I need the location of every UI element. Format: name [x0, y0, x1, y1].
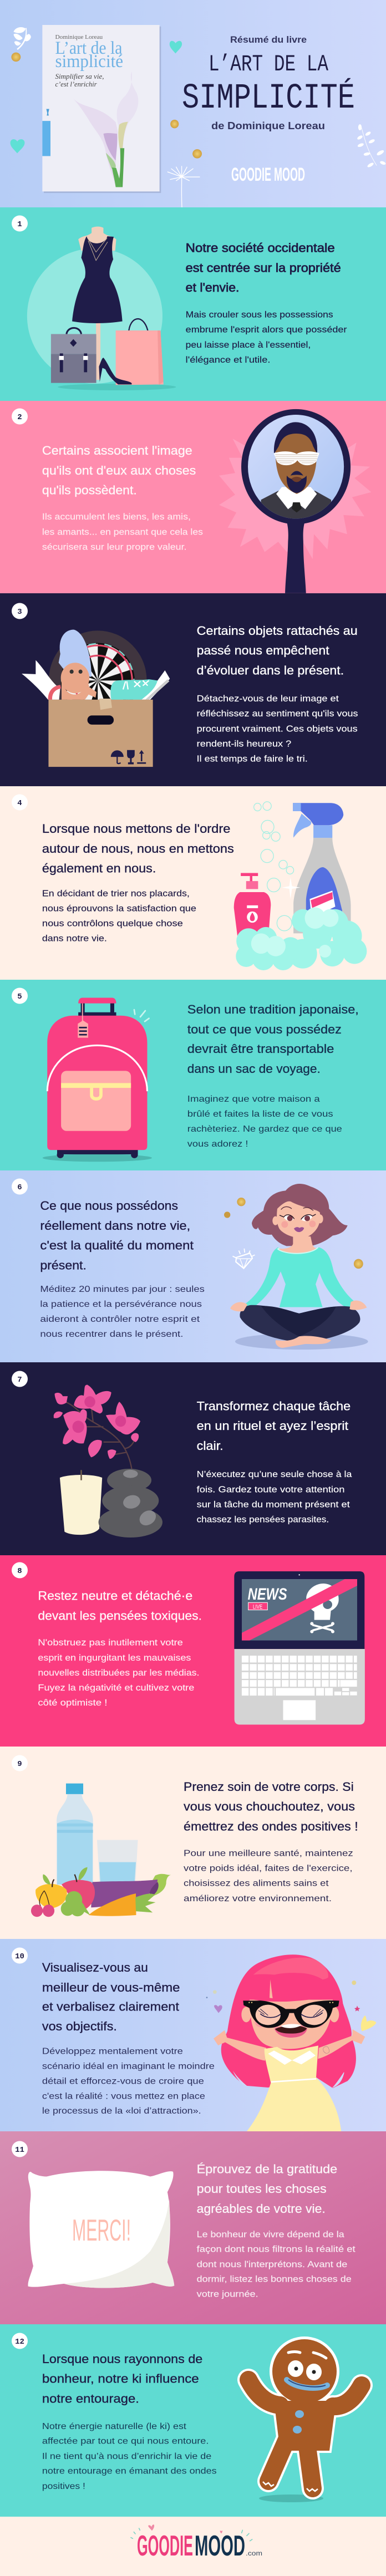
heading: Lorsque nous mettons de l'ordre: [42, 822, 231, 836]
logo: goodiemood.com: GOODIE: [137, 2530, 193, 2562]
heading: devrait être transportable: [187, 1042, 334, 1056]
badge 11: [12, 2141, 28, 2157]
heading: Éprouvez de la gratitude: [197, 2162, 337, 2176]
heading: Certains associent l'image: [42, 444, 192, 457]
illustration: laptop with toxic news: [234, 1571, 365, 1725]
heading: [197, 624, 358, 677]
body text: notre entourage en émanant des ondes: [42, 2467, 217, 2476]
heading: également en nous.: [42, 862, 156, 875]
book cover: Dominique Loreau: [55, 34, 103, 40]
title: résumé du livre: L’ART DE LA: [209, 51, 329, 78]
badge 10: [12, 1947, 28, 1964]
body text: embrume l'esprit alors que posséder: [186, 325, 347, 335]
body text: brûlé et faites la liste de ce vous: [187, 1109, 333, 1119]
heading: qu'ils possèdent.: [42, 483, 137, 497]
body text: Détachez-vous de leur image et: [197, 694, 339, 704]
body text: Il est temps de faire le tri.: [197, 754, 308, 763]
body text: Le bonheur de vivre dépend de la: [197, 2230, 344, 2239]
book cover: [42, 25, 161, 193]
heading: [184, 1780, 358, 1833]
illustration: dress, bags, shoe: [27, 227, 176, 390]
body text: Imaginez que votre maison a: [187, 1094, 320, 1104]
body text: aideront à contrôler notre esprit et: [40, 1315, 200, 1324]
book cover: c’est l’enrichir: [55, 80, 97, 88]
body text: choisissez des aliments sains et: [184, 1879, 329, 1888]
decorations: leaves, hearts and gold dots: [11, 27, 386, 211]
body text: [42, 512, 203, 552]
heading: Ce que nous possédons: [40, 1199, 178, 1213]
title: résumé du livre: de Dominique Loreau: [211, 120, 325, 131]
heading: [197, 1399, 351, 1453]
body text: le processus de la «loi d’attraction».: [42, 2106, 201, 2116]
body text: l'élégance et l'utile.: [186, 355, 270, 365]
badge 9: [12, 1755, 28, 1771]
body text: dormir, listez les bonnes choses de: [197, 2275, 352, 2284]
heading: notre entourage.: [42, 2392, 139, 2406]
badge 5: [12, 988, 28, 1004]
body text: [186, 310, 347, 365]
badge 8: [12, 1562, 28, 1578]
body text: [197, 694, 358, 763]
body text: Il ne tient qu’à nous d’enrichir la vie de: [42, 2452, 211, 2461]
heading: [40, 1199, 194, 1272]
body text: Fuyez la négativité et cultivez votre: [38, 1683, 194, 1693]
badge 9: 9: [17, 1760, 22, 1769]
body text: [42, 889, 196, 944]
body text: procurent vraiment. Ces objets vous: [197, 724, 358, 734]
heading: Restez neutre et détaché·e: [38, 1589, 192, 1602]
heading: [42, 2352, 202, 2406]
logo: goodiemood.com: .com: [246, 2549, 262, 2557]
heading: pour toutes les choses: [197, 2182, 327, 2196]
illustration: suitcase: [43, 998, 152, 1162]
badge 4: [12, 794, 28, 811]
body text: N’éxecutez qu’une seule chose à la: [197, 1470, 352, 1479]
heading: Selon une tradition japonaise,: [187, 1002, 359, 1016]
illustration: mirror: [219, 409, 371, 593]
body text: affectée par tout ce qui nous entoure.: [42, 2437, 209, 2446]
panel: 12 rayonner de bonheur: [0, 2324, 386, 2517]
badge 8: 8: [17, 1567, 22, 1576]
heading: [197, 2162, 337, 2216]
heading: [38, 1589, 202, 1622]
badge 3: [12, 603, 28, 619]
logo: goodiemood.com: MOOD: [195, 2530, 245, 2562]
heading: émettrez des ondes positives !: [184, 1820, 358, 1833]
body text: fois. Gardez toute votre attention: [197, 1485, 345, 1494]
heading: c'est la qualité du moment: [40, 1239, 194, 1253]
panel: 10 visualisez-vous: [0, 1939, 386, 2131]
badge 4: 4: [17, 799, 22, 808]
panel: header: [0, 0, 386, 211]
heading: [42, 1961, 180, 2033]
illustration: water, fruit, vegetables: [31, 1784, 171, 1917]
heading: est centrée sur la propriété: [186, 261, 341, 274]
body text: [40, 1285, 205, 1339]
panel: 6 moment présent: [0, 1170, 386, 1362]
body text: les amants... en pensant que cela les: [42, 527, 203, 537]
heading: clair.: [197, 1439, 224, 1453]
badge 2: [12, 408, 28, 425]
body text: vous adorez !: [187, 1139, 248, 1149]
badge 7: 7: [17, 1376, 22, 1384]
heading: meilleur de vous-même: [42, 1981, 180, 1994]
body text: façon dont nous filtrons la réalité et: [197, 2245, 355, 2254]
body text: nouvelles distribuées par les médias.: [38, 1668, 199, 1678]
badge 10: 10: [15, 1952, 24, 1961]
body text: la patience et la persévérance nous: [40, 1300, 202, 1309]
body text: peu laisse place à l'essentiel,: [186, 340, 311, 350]
heading: [42, 444, 196, 497]
badge 12: [12, 2333, 28, 2349]
heading: et verbalisez clairement: [42, 2000, 179, 2014]
badge 6: [12, 1179, 28, 1194]
panel: 3 objets du passé: [0, 593, 386, 786]
body text: N'obstruez pas inutilement votre: [38, 1638, 183, 1648]
heading: qu'ils ont d'eux aux choses: [42, 464, 196, 477]
heading: Notre société occidentale: [186, 241, 335, 255]
panel: 5 sac de voyage: [0, 980, 386, 1170]
badge 12: 12: [15, 2338, 24, 2346]
book cover: L’art de la: [55, 38, 123, 58]
heading: [186, 241, 341, 294]
body text: Mais crouler sous les possessions: [186, 310, 333, 320]
heading: et l'envie.: [186, 281, 240, 294]
body text: votre journée.: [197, 2289, 258, 2299]
heading: passé nous empêchent: [197, 644, 329, 658]
body text: [197, 2230, 355, 2299]
body text: côté optimiste !: [38, 1698, 107, 1708]
body text: votre poids idéal, faites de l'exercice,: [184, 1864, 353, 1874]
panel: 9 prenez soin de votre corps: [0, 1747, 386, 1939]
illustration: merci pillow: MERCI!: [72, 2213, 131, 2247]
body text: En décidant de trier nos placards,: [42, 889, 190, 898]
body text: rendent-ils heureux ?: [197, 739, 291, 749]
illustration: meditating woman: [224, 1184, 368, 1350]
body text: détail et efforcez-vous de croire que: [42, 2077, 204, 2086]
body text: sur la tâche du moment présent et: [197, 1500, 350, 1509]
body text: esprit en ingurgitant les mauvaises: [38, 1653, 191, 1663]
heading: d’évoluer dans le présent.: [197, 663, 344, 677]
heading: [187, 1002, 359, 1076]
badge 1: [12, 215, 28, 232]
badge 3: 3: [17, 608, 22, 617]
heading: autour de nous, nous en mettons: [42, 842, 234, 856]
body text: scénario idéal en imaginant le moindre: [42, 2061, 215, 2071]
body text: Pour une meilleure santé, maintenez: [184, 1849, 353, 1859]
badge 7: [12, 1371, 28, 1387]
body text: [42, 2047, 215, 2116]
heading: vos objectifs.: [42, 2019, 117, 2033]
body text: positives !: [42, 2482, 85, 2491]
book cover: Simplifier sa vie,: [55, 72, 104, 80]
body text: améliorez votre environnement.: [184, 1894, 332, 1903]
body text: [184, 1849, 353, 1903]
body text: [38, 1638, 199, 1708]
body text: réfléchissez au sentiment qu'ils vous: [197, 709, 358, 719]
body text: dont nous l'interprétons. Avant de: [197, 2260, 348, 2269]
logo: goodiemood: GOODIE MOOD: [231, 164, 305, 185]
illustration: orchid, candle, stones: [54, 1385, 162, 1538]
heading: Visualisez-vous au: [42, 1961, 148, 1974]
heading: [42, 822, 234, 875]
title: résumé du livre: [182, 34, 355, 131]
heading: en un rituel et ayez l’esprit: [197, 1419, 348, 1433]
body text: chassez les pensées parasites.: [197, 1515, 329, 1525]
heading: réellement dans notre vie,: [40, 1219, 190, 1233]
heading: Prenez soin de votre corps. Si: [184, 1780, 354, 1794]
badge 1: 1: [17, 220, 22, 229]
body text: Méditez 20 minutes par jour : seules: [40, 1285, 205, 1294]
heading: agréables de votre vie.: [197, 2202, 326, 2216]
heading: devant les pensées toxiques.: [38, 1608, 202, 1622]
badge 2: 2: [17, 413, 22, 422]
footer: [0, 2517, 386, 2576]
book cover: simplicité: [55, 52, 123, 72]
illustration: happy girl with glasses: [206, 1954, 376, 2131]
illustration: laptop with toxic news: NEWS: [248, 1585, 287, 1603]
illustration: gingerbread man: [248, 2336, 362, 2502]
panel: 8 pensées toxiques: [0, 1555, 386, 1747]
panel: 7 rituel: [0, 1362, 386, 1555]
panel: 2 image de soi: [0, 401, 386, 593]
heading: vous vous chouchoutez, vous: [184, 1800, 355, 1814]
badge 11: 11: [15, 2146, 24, 2155]
heading: présent.: [40, 1259, 87, 1272]
panel: 11 gratitude: [0, 2131, 386, 2324]
heading: bonheur, notre ki influence: [42, 2372, 199, 2386]
body text: Notre énergie naturelle (le ki) est: [42, 2422, 187, 2431]
body text: nous éprouvons la satisfaction que: [42, 904, 196, 913]
heading: Lorsque nous rayonnons de: [42, 2352, 202, 2366]
body text: rachèteriez. Ne gardez que ce que: [187, 1124, 342, 1134]
body text: Ils accumulent les biens, les amis,: [42, 512, 191, 522]
body text: [42, 2422, 217, 2491]
panel: 1 société occidentale: [0, 207, 386, 401]
body text: Développez mentalement votre: [42, 2047, 183, 2056]
badge 6: 6: [17, 1183, 22, 1192]
body text: [187, 1094, 342, 1149]
body text: nous contrôlons quelque chose: [42, 919, 183, 928]
illustration: cardboard box of keepsakes: [22, 630, 170, 767]
body text: [197, 1470, 352, 1525]
panel: 4 mettre de l'ordre: [0, 786, 386, 980]
body text: c'est la réalité : vous mettez en place: [42, 2091, 205, 2101]
heading: Certains objets rattachés au: [197, 624, 358, 638]
badge 5: 5: [17, 992, 22, 1001]
illustration: merci pillow: [28, 2171, 174, 2288]
heading: dans un sac de voyage.: [187, 1062, 321, 1076]
body text: dans notre vie.: [42, 934, 107, 944]
illustration: spray bottle, soap and foam: [234, 802, 367, 970]
illustration: laptop with toxic news: LIVE: [253, 1603, 262, 1610]
heading: tout ce que vous possédez: [187, 1022, 342, 1036]
body text: nous recentrer dans le présent.: [40, 1330, 183, 1339]
heading: Transformez chaque tâche: [197, 1399, 351, 1413]
title: résumé du livre: Résumé du livre: [230, 34, 307, 45]
body text: sécurisera sur leur propre valeur.: [42, 542, 187, 552]
